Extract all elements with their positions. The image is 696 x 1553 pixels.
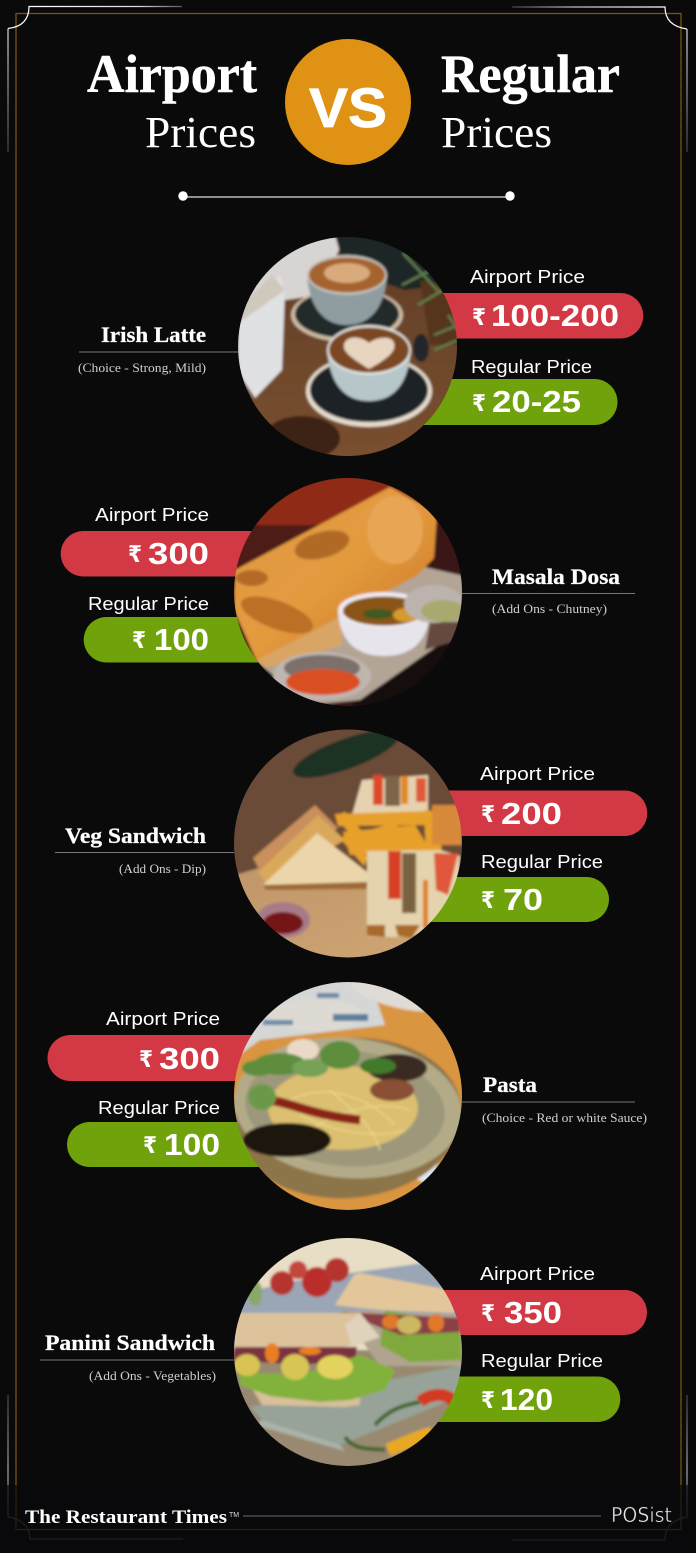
regular price pill: Regular Price [471, 357, 592, 377]
airport price pill: ₹ [139, 1047, 153, 1073]
photo: pasta bowl [234, 982, 462, 1210]
vs badge: VS [309, 76, 387, 139]
footer brand: TM [229, 1512, 239, 1519]
airport price pill: Airport Price [480, 1264, 595, 1284]
regular price pill [400, 357, 618, 425]
airport price pill: Airport Price [480, 764, 595, 784]
title left [87, 44, 257, 157]
footer logo: POSist [611, 1503, 672, 1527]
label: panini sandwich: Panini Sandwich [45, 1330, 215, 1355]
vs badge [285, 39, 411, 165]
airport price pill: 300 [159, 1041, 220, 1076]
regular price pill [400, 852, 609, 922]
label: pasta: Pasta [483, 1072, 537, 1097]
label: veg sandwich: (Add Ons - Dip) [119, 862, 206, 876]
label: masala dosa: (Add Ons - Chutney) [492, 602, 607, 616]
airport price pill: Airport Price [95, 505, 209, 525]
label: panini sandwich [40, 1330, 234, 1383]
label: masala dosa [462, 564, 635, 616]
label: irish latte: (Choice - Strong, Mild) [78, 361, 206, 375]
airport price pill: 200 [501, 796, 562, 831]
photo: coffee cups [236, 235, 460, 460]
label: pasta [462, 1072, 647, 1125]
title right: Prices [441, 108, 552, 157]
panel: veg sandwich [55, 721, 647, 960]
panel: panini sandwich [40, 1236, 647, 1470]
regular price pill: ₹ [481, 1388, 495, 1414]
panel: pasta [48, 972, 647, 1212]
airport price pill: Airport Price [106, 1009, 220, 1029]
title left: Prices [145, 108, 256, 157]
photo: veg sandwich [232, 721, 464, 960]
airport price pill: Airport Price [470, 267, 585, 287]
footer fade overlay [0, 1485, 696, 1553]
corner ornaments top [8, 6, 687, 152]
airport price pill: ₹ [481, 1301, 495, 1327]
regular price pill: Regular Price [98, 1098, 220, 1118]
airport price pill: 100-200 [491, 298, 619, 333]
label: veg sandwich: Veg Sandwich [65, 823, 206, 848]
airport price pill: ₹ [472, 305, 486, 331]
airport price pill: ₹ [128, 542, 142, 568]
airport price pill [400, 267, 643, 338]
label: pasta: (Choice - Red or white Sauce) [482, 1111, 647, 1125]
regular price pill: 120 [500, 1382, 553, 1417]
regular price pill: ₹ [481, 888, 495, 914]
regular price pill: 70 [503, 882, 543, 917]
airport price pill: 350 [504, 1295, 562, 1330]
regular price pill [400, 1351, 620, 1422]
airport price pill [400, 764, 647, 836]
title left: Airport [87, 44, 257, 104]
corner ornaments bottom [8, 1395, 687, 1540]
regular price pill: 20-25 [492, 384, 581, 419]
panel: irish latte [78, 235, 643, 460]
title divider [178, 191, 515, 201]
label: masala dosa: Masala Dosa [492, 564, 620, 589]
label: veg sandwich [55, 823, 234, 876]
label: irish latte: Irish Latte [101, 322, 206, 347]
regular price pill: 100 [164, 1127, 220, 1162]
regular price pill: Regular Price [88, 594, 209, 614]
regular price pill: ₹ [472, 391, 486, 417]
title right [441, 44, 620, 157]
label: irish latte [78, 322, 240, 375]
panel: masala dosa [61, 476, 635, 708]
regular price pill: Regular Price [481, 852, 603, 872]
regular price pill: 100 [154, 622, 209, 657]
regular price pill [67, 1098, 300, 1167]
airport price pill [61, 505, 300, 576]
regular price pill: Regular Price [481, 1351, 603, 1371]
label: panini sandwich: (Add Ons - Vegetables) [89, 1369, 216, 1383]
photo: panini sandwiches [232, 1236, 464, 1470]
footer divider [243, 1516, 601, 1517]
airport price pill: ₹ [481, 802, 495, 828]
title right: Regular [441, 44, 620, 104]
airport price pill [48, 1009, 300, 1081]
airport price pill: 300 [148, 536, 209, 571]
regular price pill: ₹ [143, 1133, 157, 1159]
airport price pill [400, 1264, 647, 1335]
regular price pill [84, 594, 300, 662]
footer brand: The Restaurant Times [25, 1507, 227, 1528]
photo: masala dosa [232, 476, 465, 708]
regular price pill: ₹ [132, 628, 146, 654]
